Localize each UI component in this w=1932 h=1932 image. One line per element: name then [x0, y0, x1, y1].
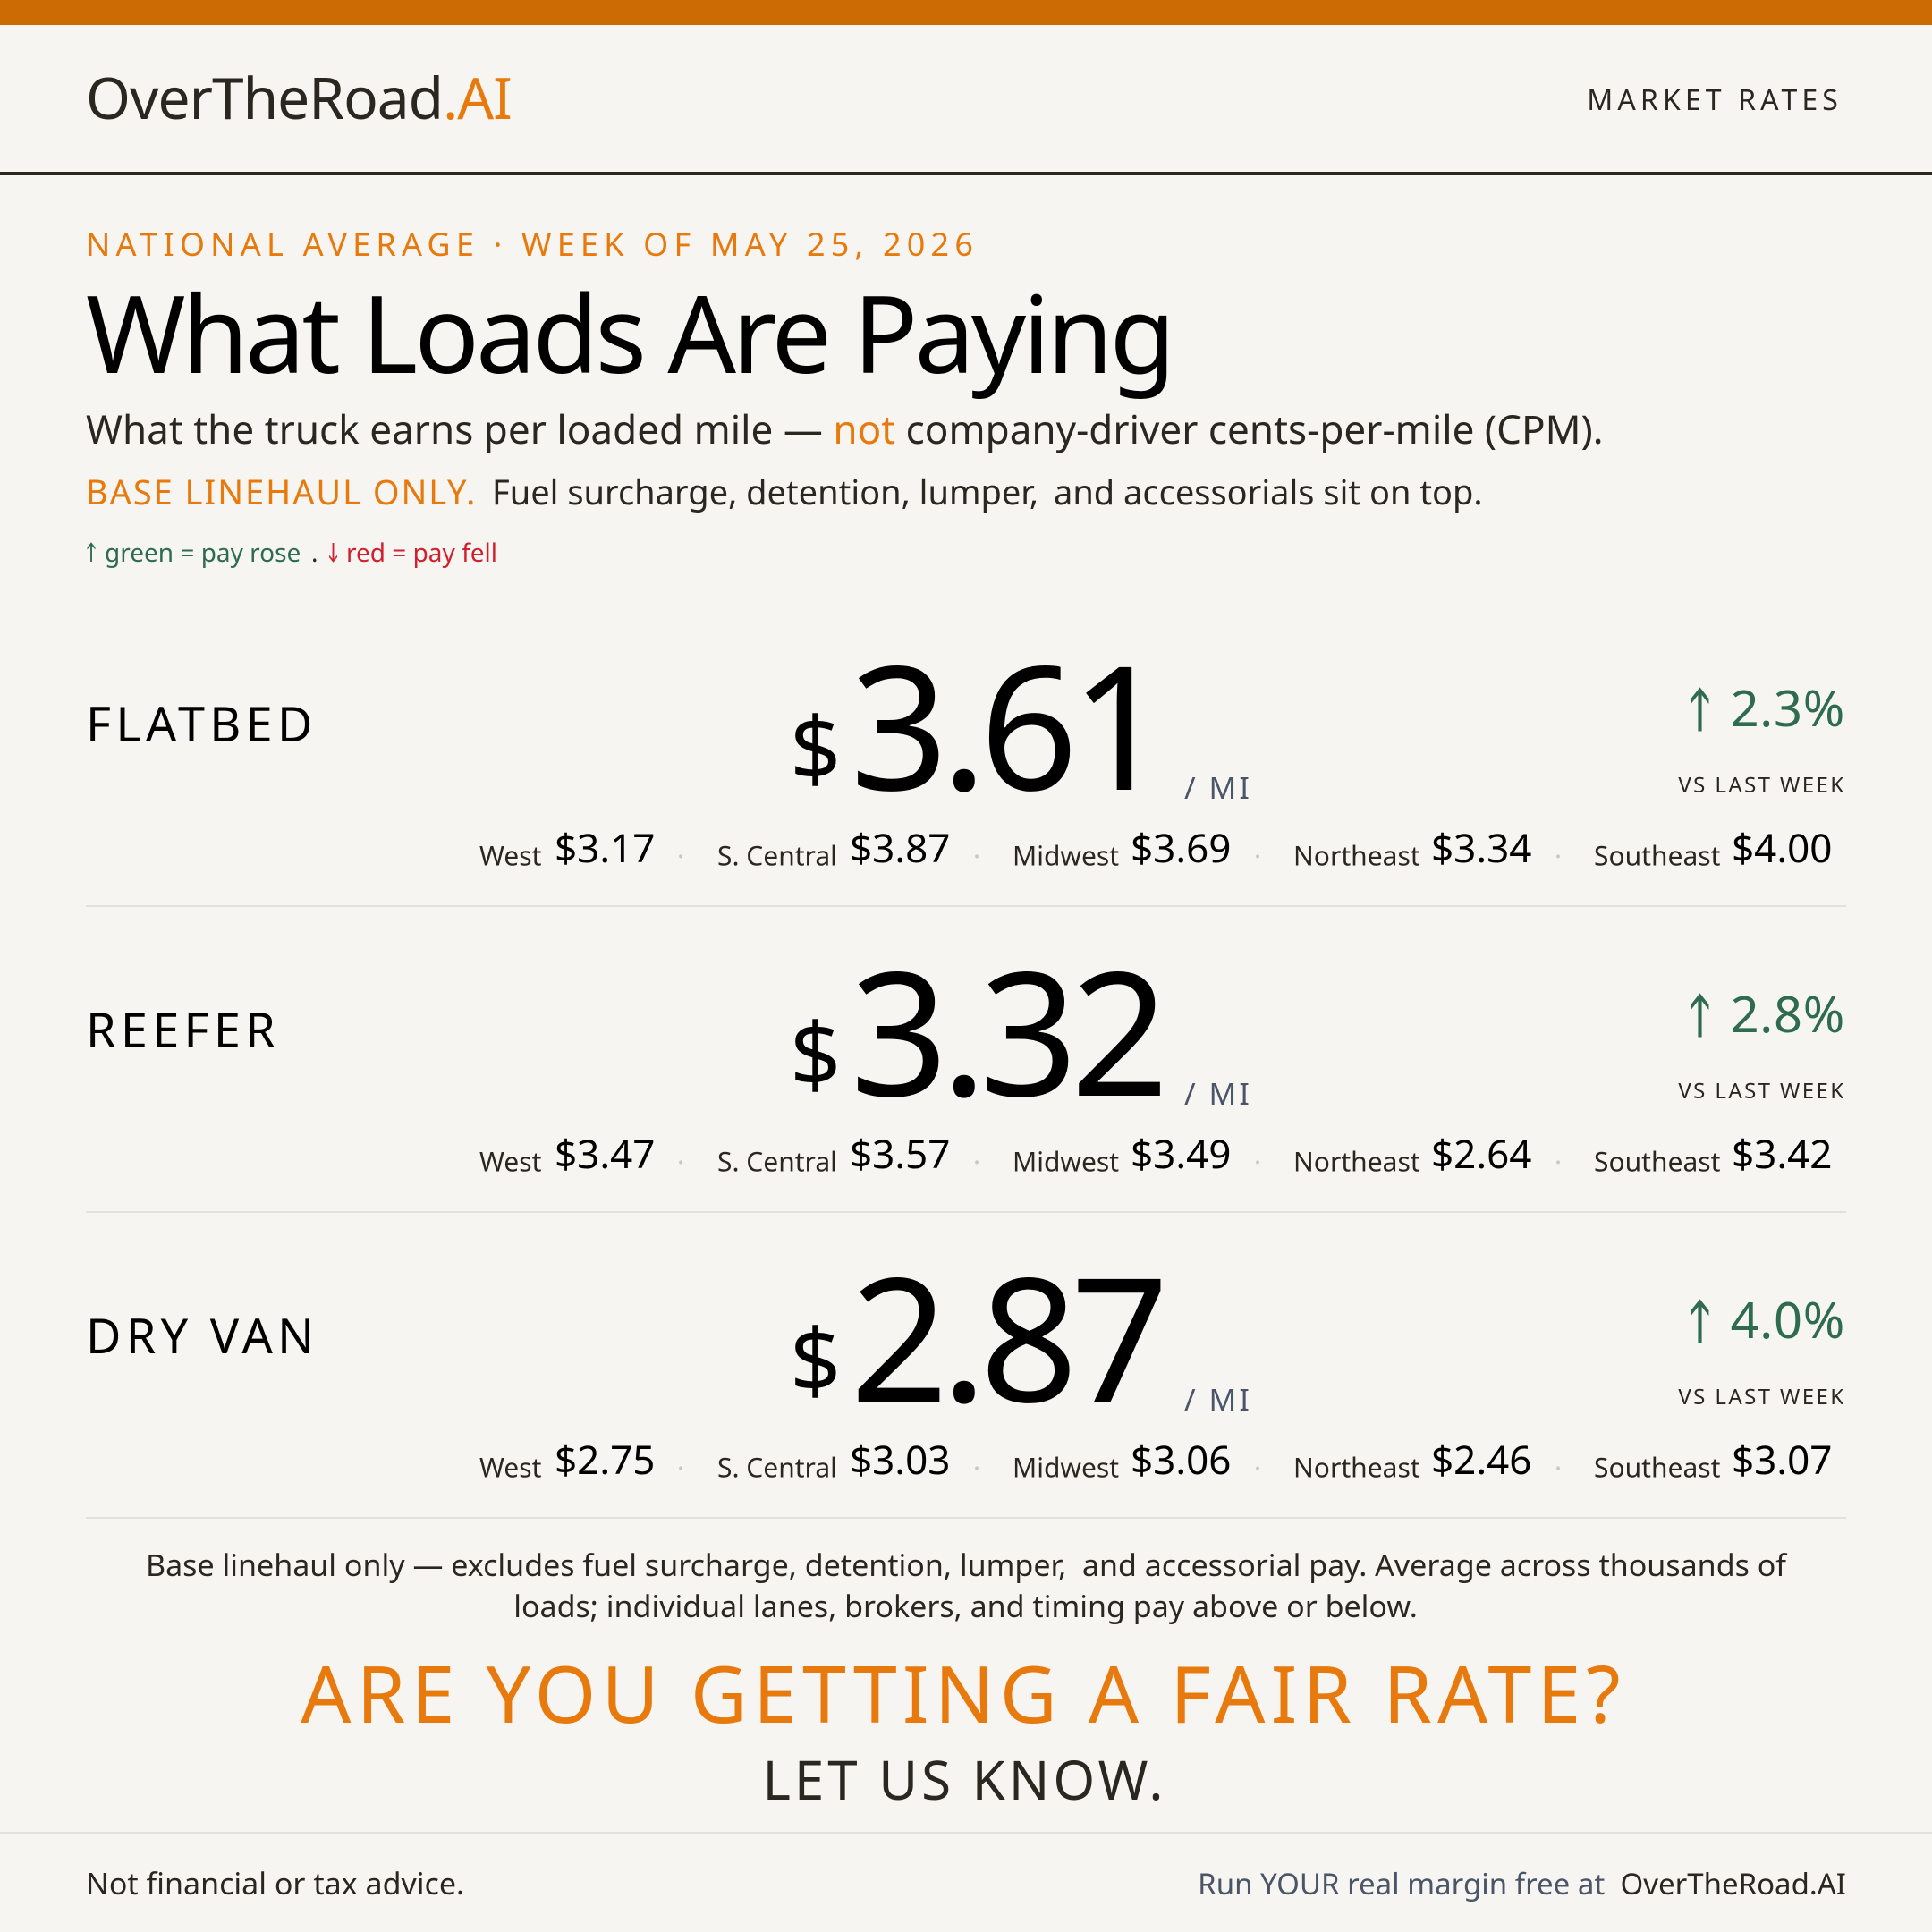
regional rates: Northeast: [1293, 837, 1420, 873]
regional rates: S. Central: [717, 1449, 837, 1485]
base linehaul note: Fuel surcharge, detention, lumper,: [492, 469, 1047, 515]
regional rates: $3.06: [1131, 1432, 1231, 1486]
regional rates: $3.03: [850, 1432, 950, 1486]
price: 3.61: [850, 607, 1162, 841]
per mile unit: / MI: [1184, 767, 1252, 808]
weekly change: [1674, 979, 1845, 1047]
regional rates: [479, 820, 1832, 874]
weekly change: ↑: [1674, 685, 1724, 735]
regional rates: $3.87: [850, 820, 950, 874]
base linehaul note: and accessorials sit on top.: [1054, 469, 1483, 515]
price: 3.32: [850, 913, 1162, 1147]
vs last week: VS LAST WEEK: [1678, 1382, 1846, 1411]
regional rates: $2.64: [1431, 1126, 1531, 1180]
regional rates: ·: [677, 837, 684, 874]
regional rates: Midwest: [1013, 1143, 1119, 1179]
subtitle: What the truck earns per loaded mile — not company-driver cents-per-mile (CPM).: [86, 402, 1604, 455]
regional rates: ·: [677, 1449, 684, 1486]
eyebrow: NATIONAL AVERAGE · WEEK OF MAY 25, 2026: [86, 222, 979, 266]
legend: .: [311, 536, 318, 570]
regional rates: [479, 1432, 1832, 1486]
weekly change: 2.3%: [1731, 674, 1845, 741]
regional rates: $3.17: [555, 820, 655, 874]
section tag: MARKET RATES: [1587, 80, 1843, 119]
regional rates: ·: [677, 1143, 684, 1180]
regional rates: ·: [1555, 1143, 1562, 1180]
weekly change: 2.8%: [1731, 979, 1845, 1047]
regional rates: Midwest: [1013, 1449, 1119, 1485]
base linehaul note: BASE LINEHAUL ONLY.: [86, 469, 477, 515]
regional rates: $2.75: [555, 1432, 655, 1486]
regional rates: ·: [973, 837, 980, 874]
category label: FLATBED: [86, 690, 318, 756]
disclaimer: Not financial or tax advice.: [86, 1862, 464, 1903]
regional rates: ·: [1555, 837, 1562, 874]
regional rates: Southeast: [1594, 1449, 1721, 1485]
regional rates: $3.07: [1732, 1432, 1832, 1486]
weekly change: ↑: [1674, 1297, 1724, 1347]
regional rates: ·: [973, 1143, 980, 1180]
regional rates: S. Central: [717, 1143, 837, 1179]
header: [86, 58, 1843, 136]
regional rates: Northeast: [1293, 1449, 1420, 1485]
regional rates: [479, 1126, 1832, 1180]
price: 2.87: [850, 1219, 1162, 1453]
rate row: dry van: [86, 1219, 1846, 1486]
promo: Run YOUR real margin free at OverTheRoad.AI: [1198, 1863, 1846, 1903]
legend: green = pay rose: [105, 536, 301, 570]
weekly change: 4.0%: [1731, 1285, 1845, 1353]
logo: OverTheRoad.AI: [86, 58, 512, 136]
regional rates: ·: [1555, 1449, 1562, 1486]
regional rates: $3.42: [1732, 1126, 1832, 1180]
price: $: [790, 992, 841, 1114]
regional rates: Southeast: [1594, 837, 1721, 873]
regional rates: $3.47: [555, 1126, 655, 1180]
disclaimer note: [146, 1544, 1788, 1626]
regional rates: ·: [973, 1449, 980, 1486]
regional rates: $3.57: [850, 1126, 950, 1180]
rate row: reefer: [86, 913, 1846, 1180]
footer: [86, 1862, 1846, 1903]
regional rates: ·: [1254, 1449, 1261, 1486]
disclaimer note: Base linehaul only — excludes fuel surcharge, detention, lumper, and accessorial pay. Average across thousands of: [146, 1544, 1788, 1585]
regional rates: Northeast: [1293, 1143, 1420, 1179]
regional rates: $4.00: [1732, 820, 1832, 874]
weekly change: [1674, 674, 1845, 741]
vs last week: VS LAST WEEK: [1678, 1076, 1846, 1106]
regional rates: ·: [1254, 837, 1261, 874]
regional rates: $3.69: [1131, 820, 1231, 874]
regional rates: $2.46: [1431, 1432, 1531, 1486]
regional rates: $3.49: [1131, 1126, 1231, 1180]
regional rates: West: [479, 837, 542, 873]
per mile unit: / MI: [1184, 1072, 1252, 1114]
price: $: [790, 686, 841, 808]
call to action secondary: LET US KNOW.: [762, 1742, 1167, 1816]
vs last week: VS LAST WEEK: [1678, 770, 1846, 800]
per mile unit: / MI: [1184, 1378, 1252, 1419]
weekly change: [1674, 1285, 1845, 1353]
regional rates: $3.34: [1431, 820, 1531, 874]
regional rates: Midwest: [1013, 837, 1119, 873]
call to action: ARE YOU GETTING A FAIR RATE?: [301, 1639, 1626, 1746]
legend: ↓: [322, 542, 344, 564]
top accent bar: [0, 0, 1932, 25]
category label: DRY VAN: [86, 1301, 318, 1368]
weekly change: ↑: [1674, 991, 1724, 1041]
regional rates: Southeast: [1594, 1143, 1721, 1179]
regional rates: ·: [1254, 1143, 1261, 1180]
category label: REEFER: [86, 996, 280, 1062]
regional rates: West: [479, 1143, 542, 1179]
disclaimer note: loads; individual lanes, brokers, and timing pay above or below.: [513, 1585, 1418, 1626]
regional rates: S. Central: [717, 837, 837, 873]
regional rates: West: [479, 1449, 542, 1485]
legend: ↑: [80, 541, 102, 564]
title: What Loads Are Paying: [86, 259, 1173, 405]
legend: red = pay fell: [346, 536, 497, 570]
rate row: flatbed: [86, 607, 1846, 874]
intro block: [80, 222, 1604, 570]
price: $: [790, 1298, 841, 1419]
